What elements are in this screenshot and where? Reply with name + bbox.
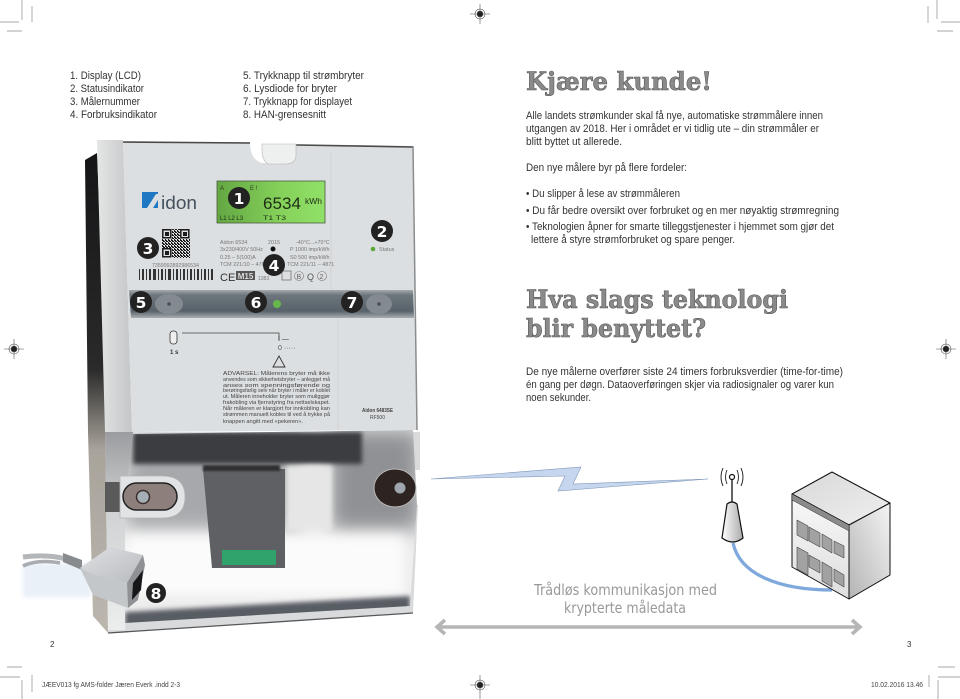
rating plate text: 2 bbox=[320, 274, 324, 281]
double-headed arrow bbox=[437, 620, 860, 634]
number badges: 4 bbox=[269, 257, 280, 275]
benefits list: lettere å styre strømforbruket og spare penger. bbox=[531, 234, 735, 246]
status light bbox=[371, 247, 395, 253]
rating plate text: -40°C...+70°C bbox=[296, 240, 330, 246]
warning text: anvendes som sikkerhetsbryter – anlegget må bbox=[223, 376, 330, 383]
warning text: anses som spenningsførende og bbox=[223, 383, 330, 389]
warning text: frakobling via fjernstyring fra nettselskapet. bbox=[223, 400, 330, 406]
number badges bbox=[130, 187, 393, 603]
LCD display: kWh bbox=[305, 196, 322, 206]
legend: parts list left column: 3. Målernummer bbox=[70, 96, 140, 108]
rating plate text: Q bbox=[307, 272, 314, 282]
LCD display: E ! bbox=[250, 186, 258, 192]
legend: parts list right column bbox=[243, 70, 364, 121]
number badges: 2 bbox=[377, 223, 387, 241]
warning text: Når måleren er klargjort for innkobling kan bbox=[223, 405, 330, 412]
rating plate text: S0 500 imp/kWh bbox=[290, 255, 330, 261]
warning text: Aidon 6483SE bbox=[362, 408, 394, 414]
Aidon logo: idon bbox=[161, 193, 197, 213]
QR code bbox=[162, 229, 190, 258]
caption: wireless communication bbox=[533, 581, 717, 617]
barcode bbox=[139, 263, 213, 280]
page number right: 3 bbox=[907, 640, 912, 649]
intro paragraph: blitt byttet ut allerede. bbox=[526, 136, 622, 148]
legend: parts list right column: 5. Trykknapp til strømbryter bbox=[243, 70, 364, 82]
barcode: 7359992892986534 bbox=[152, 263, 199, 269]
Aidon logo bbox=[142, 192, 197, 213]
footer file name: JÆEV013 fg AMS-folder Jæren Everk .indd 2-3 bbox=[42, 680, 180, 689]
lightning bolt radio signal bbox=[431, 467, 708, 491]
benefits list: • Du slipper å lese av strømmåleren bbox=[526, 188, 680, 200]
lower white label plate bbox=[170, 331, 296, 367]
technology paragraph: De nye målerne overfører siste 24 timers forbruksverdier (time-for-time) bbox=[526, 366, 843, 378]
lower white label plate: 0 ····· bbox=[278, 345, 296, 352]
rating plate text: Aidon 6534 bbox=[220, 240, 247, 246]
right mounting screw bbox=[374, 469, 416, 507]
button band bbox=[129, 290, 414, 318]
status light: Status bbox=[379, 247, 395, 253]
number badges: 8 bbox=[151, 585, 161, 603]
page number left: 2 bbox=[50, 640, 55, 649]
rating plate text: TCM 221/11 – 4871 bbox=[287, 262, 334, 268]
technology paragraph bbox=[526, 366, 843, 404]
number badges: 6 bbox=[251, 294, 261, 312]
heading: Hva slags teknologi bbox=[526, 285, 788, 343]
meter rear housing bbox=[85, 153, 108, 633]
rating plate text: 3x230/400V 50Hz bbox=[220, 247, 263, 253]
HAN network plug bbox=[80, 547, 145, 608]
rating plate text: 2015 bbox=[268, 240, 280, 246]
legend: parts list left column bbox=[70, 70, 157, 121]
legend: parts list left column: 4. Forbruksindikator bbox=[70, 109, 157, 121]
intro paragraph: Den nye målere byr på flere fordeler: bbox=[526, 162, 687, 174]
heading: Hva slags teknologi: blir benyttet? bbox=[526, 314, 706, 343]
legend: parts list right column: 7. Trykknapp for displayet bbox=[243, 96, 352, 108]
building icon bbox=[792, 472, 890, 599]
legend: parts list right column: 6. Lysdiode for bryter bbox=[243, 83, 337, 95]
number badges: 3 bbox=[143, 240, 153, 258]
LCD display: L1 L2 L3 bbox=[220, 215, 243, 222]
number badges: 7 bbox=[347, 294, 357, 312]
LCD display: T1 T3 bbox=[263, 215, 287, 222]
meter side panel bbox=[97, 140, 132, 432]
rating plate text bbox=[220, 240, 334, 284]
rating plate text: M15 bbox=[238, 272, 254, 281]
translucent lower cover bbox=[105, 430, 420, 633]
lower white label plate: 1 s bbox=[170, 350, 179, 356]
legend: parts list left column: 2. Statusindikator bbox=[70, 83, 144, 95]
intro paragraph bbox=[526, 110, 823, 174]
technology paragraph: én gang per døgn. Dataoverføringen skjer via radiosignaler og varer kun bbox=[526, 379, 834, 391]
rating plate text: CE bbox=[220, 272, 235, 284]
warning text bbox=[223, 370, 394, 425]
technology paragraph: noen sekunder. bbox=[526, 392, 591, 404]
electricity meter photo bbox=[23, 140, 420, 633]
rating plate text: B bbox=[296, 274, 302, 281]
warning text: RF500 bbox=[370, 415, 385, 421]
left mounting screw bbox=[120, 476, 185, 518]
rating plate text: P 1000 imp/kWh bbox=[290, 247, 329, 253]
LCD display: A bbox=[220, 186, 224, 192]
LCD display: 6534 bbox=[263, 194, 301, 213]
benefits list: • Du får bedre oversikt over forbruket og en mer nøyaktig strømregning bbox=[526, 205, 839, 217]
rating plate text: TCM 221/10 – 4769 bbox=[220, 262, 268, 268]
caption: wireless communication: Trådløs kommunikasjon med bbox=[533, 581, 717, 599]
LCD display bbox=[217, 181, 325, 223]
heading: Kjære kunde: Kjære kunde! bbox=[526, 67, 712, 96]
rating plate text: 1383 bbox=[258, 276, 269, 282]
warning text: strømmen manuelt kobles til ved å trykke på bbox=[223, 411, 330, 418]
rating plate text: 0.25 – 5(100)A bbox=[220, 255, 256, 261]
heading: Hva slags teknologi: Hva slags teknologi bbox=[526, 285, 788, 314]
benefits list: • Teknologien åpner for smarte tilleggstjenester i hjemmet som gjør det bbox=[526, 221, 834, 233]
meter top plate bbox=[123, 142, 417, 432]
HAN cable bbox=[23, 553, 91, 597]
legend: parts list right column: 8. HAN-grensesnitt bbox=[243, 109, 326, 121]
intro paragraph: utgangen av 2018. Her i området er vi tidlig ute – din strømmåler er bbox=[526, 123, 819, 135]
lower white label plate: I — bbox=[278, 336, 289, 343]
green terminals bbox=[222, 550, 276, 565]
cable to building bbox=[733, 543, 832, 590]
warning text: berøringsfarlig selv når bryter i måler er koblet bbox=[223, 387, 331, 394]
number badges: 5 bbox=[136, 294, 146, 312]
warning text: ADVARSEL: Målerens bryter må ikke bbox=[223, 370, 330, 377]
number badges: 1 bbox=[234, 190, 244, 208]
legend: parts list left column: 1. Display (LCD) bbox=[70, 70, 141, 82]
warning text: ut. Måleren inneholder bryter som muliggjør bbox=[223, 393, 330, 400]
benefits list bbox=[526, 188, 839, 246]
footer date: 10.02.2016 13.46 bbox=[871, 680, 923, 689]
sealing tab bbox=[262, 144, 296, 164]
warning text: knappen angitt med «pekeren». bbox=[223, 419, 303, 425]
intro paragraph: Alle landets strømkunder skal få nye, automatiske strømmålere innen bbox=[526, 110, 823, 122]
caption: wireless communication: krypterte måledata bbox=[564, 599, 686, 617]
antenna icon bbox=[721, 468, 743, 542]
